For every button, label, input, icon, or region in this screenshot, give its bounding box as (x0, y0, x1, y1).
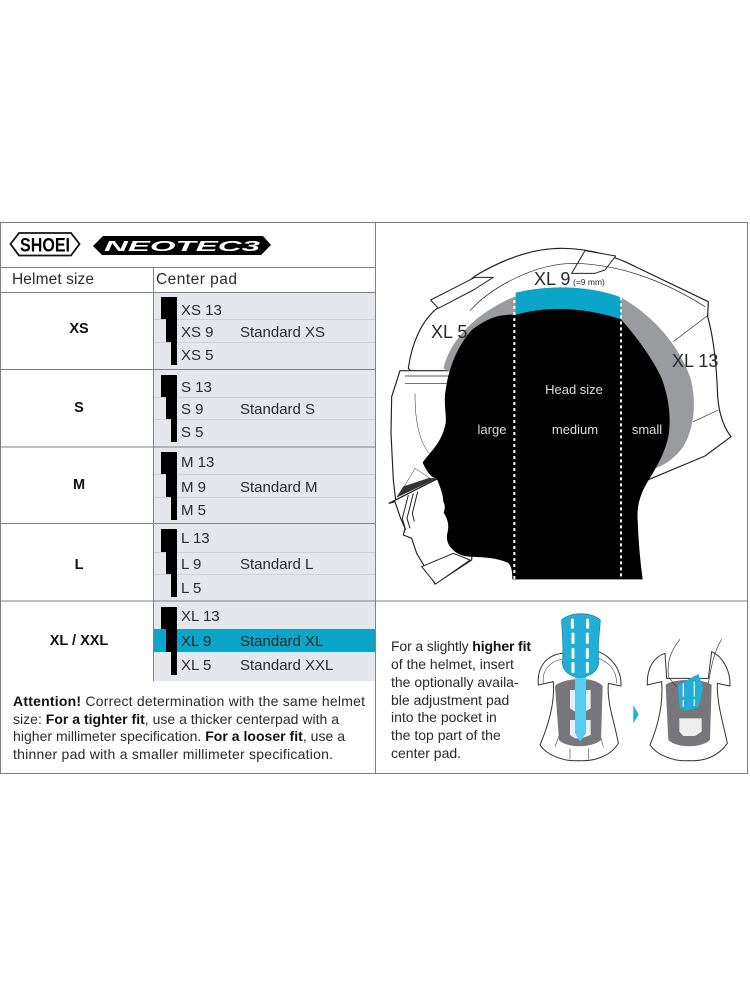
pad names: L (181, 530, 313, 597)
visor (391, 371, 475, 500)
column heading: Center pad: Center pad (156, 271, 237, 288)
pad names: M (181, 454, 318, 519)
head size boundaries (514, 294, 621, 579)
column heading: Helmet size: Helmet size (12, 271, 94, 288)
arrow (633, 705, 639, 723)
logo: SHOEI: SHOEI (20, 236, 70, 256)
pad names: L: Standard L (240, 556, 313, 573)
head size labels: medium (552, 422, 598, 437)
size label: M: M (73, 477, 85, 493)
pad names: M: M 9 (181, 479, 206, 496)
pad names: L: L 13 (181, 530, 210, 547)
panel: center pad size table (0, 267, 375, 681)
text block: attention note: higher millimeter specification. For a looser fit, use a (13, 728, 345, 744)
panel frame and dividers (0, 222, 748, 774)
helmet shell outline (389, 248, 731, 584)
pad names: M: M 5 (181, 502, 206, 519)
size label: S: S (74, 400, 84, 416)
panel: adjustment pad instructions: center pad. (391, 745, 461, 761)
panel: adjustment pad instructions: ble adjustment pad (391, 692, 509, 708)
panel: adjustment pad instructions: into the pocket in (391, 709, 497, 725)
panel: adjustment pad instructions: For a slightly higher fit (391, 638, 531, 654)
text block: attention note: thinner pad with a smaller millimeter specification. (13, 746, 333, 762)
pad names: S: S 5 (181, 424, 204, 441)
pad names: L: L 9 (181, 556, 201, 573)
pad names: XS: XS 13 (181, 302, 222, 319)
pad names: S (181, 379, 315, 441)
chin bar (389, 478, 475, 584)
pad names: XL: Standard XL (240, 633, 323, 650)
head silhouette (423, 309, 670, 579)
helmet label: XL 9: XL 9 (534, 269, 570, 289)
highlighted row: XL 9 (153, 629, 375, 652)
pad names: XS: XS 5 (181, 347, 214, 364)
helmet label: XL 13: XL 13 (672, 351, 718, 371)
pad names: XS (181, 302, 325, 364)
pad names: S: S 9 (181, 401, 204, 418)
pad names: M: M 13 (181, 454, 214, 471)
panel: adjustment pad instructions (391, 638, 531, 761)
panel: adjustment pad instructions: the top part of the (391, 727, 501, 743)
helmet label: XL 5: XL 5 (431, 322, 467, 342)
panel: adjustment pad instructions: the optionally availa- (391, 674, 519, 690)
pad names: S: S 13 (181, 379, 212, 396)
left pad (538, 614, 621, 761)
head size labels: large (478, 422, 506, 437)
size label: XS: XS (69, 321, 89, 337)
pad names: XL: XL 9 (181, 633, 211, 650)
pad names: XS: XS 9 (181, 324, 214, 341)
pad names: XL (181, 608, 333, 674)
logo: Neotec 3: NEOTEC3 (104, 238, 261, 255)
pad names: XS: Standard XS (240, 324, 325, 341)
illustration: inserting adjustment pad (538, 614, 730, 761)
helmet label: XL 9 (534, 269, 605, 289)
liner: XL 5 and XL 13 pads (443, 296, 694, 469)
pad names: XL: XL 13 (181, 608, 220, 625)
pad names: XL: Standard XXL (240, 657, 333, 674)
head size labels: Head size (545, 382, 603, 397)
head size labels: small (632, 422, 662, 437)
liner: XL 9 center pad (516, 287, 621, 320)
size label: L: L (75, 557, 84, 573)
illustration: head inside helmet cross-section (389, 248, 731, 584)
text block: attention note: size: For a tighter fit, use a thicker centerpad with a (13, 711, 339, 727)
panel: adjustment pad instructions: of the helmet, insert (391, 656, 514, 672)
text block: attention note (13, 693, 365, 762)
pad names: XL: XL 5 (181, 657, 211, 674)
text block: attention note: Attention! Correct determination with the same helmet (13, 693, 365, 709)
size label: XL / XXL: XL / XXL (50, 633, 108, 649)
pad names: S: Standard S (240, 401, 315, 418)
helmet label: XL 9: (=9 mm) (573, 277, 605, 287)
pad thickness wedges (161, 297, 177, 675)
pad names: M: Standard M (240, 479, 318, 496)
logo: Neotec 3 (93, 236, 271, 255)
right pad (647, 639, 730, 761)
head size labels (478, 382, 662, 437)
pad names: L: L 5 (181, 580, 201, 597)
